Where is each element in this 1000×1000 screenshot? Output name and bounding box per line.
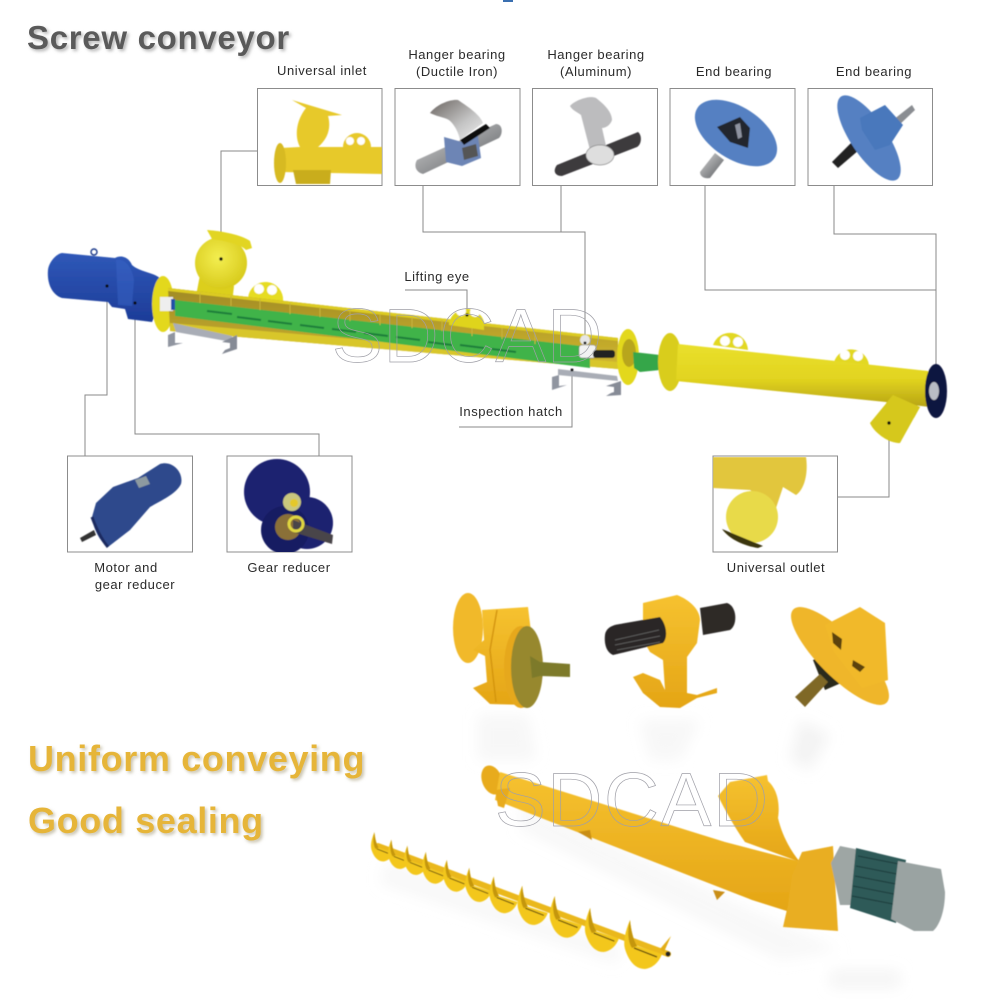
icon: universal outlet	[713, 457, 807, 548]
title: Screw conveyor	[29, 21, 292, 58]
label: lifting eye: Lifting eye	[404, 269, 470, 284]
middle flange	[617, 329, 639, 385]
panel: gear reducer: Gear reducer	[247, 560, 331, 575]
panel: hanger bearing ductile iron: (Ductile Iron)	[416, 64, 498, 79]
label: inspection hatch: Inspection hatch	[459, 404, 563, 419]
panel: motor and gear reducer: Motor and	[94, 560, 158, 575]
lugs right	[713, 333, 869, 365]
lifting eye lug	[449, 306, 484, 330]
electric motor	[831, 846, 860, 905]
icon: blue end bearing	[826, 86, 915, 190]
inlet	[718, 775, 800, 862]
panel: universal inlet	[258, 63, 382, 186]
motor	[48, 249, 161, 322]
panel: universal inlet: Universal inlet	[277, 63, 367, 78]
panel: hanger bearing aluminum: Hanger bearing	[547, 47, 645, 62]
headline: uniform conveying: Uniform conveying	[28, 738, 365, 779]
lifting lug	[248, 282, 283, 301]
panel: end bearing 1	[670, 64, 795, 186]
top edge mark	[503, 0, 513, 2]
flange left	[152, 276, 174, 332]
panel: hanger bearing ductile iron: Hanger bearing	[408, 47, 506, 62]
end plate	[925, 364, 947, 418]
hanger bearing in trough	[579, 335, 615, 358]
panel: hanger bearing aluminum: (Aluminum)	[560, 64, 632, 79]
headline: good sealing: Good sealing	[28, 800, 264, 841]
discharge outlet	[870, 395, 920, 443]
exposed green shaft	[633, 352, 660, 372]
panel: universal outlet: Universal outlet	[727, 560, 825, 575]
panel: motor and gear reducer	[68, 456, 192, 592]
screw shaft green	[175, 300, 590, 368]
casing	[477, 762, 507, 798]
product: conveyor assembly	[477, 762, 945, 931]
panel: end bearing 1: End bearing	[696, 64, 772, 79]
callout lines	[85, 151, 936, 497]
icon: gear reducer	[244, 459, 333, 554]
inlet	[195, 230, 252, 303]
product: end bearing yellow	[778, 594, 902, 718]
open trough	[160, 288, 618, 369]
icon: blue end disc	[683, 86, 789, 180]
product: gearbox	[453, 593, 570, 708]
panel: motor and gear reducer: gear reducer	[95, 577, 175, 592]
product: hanger bearing yellow	[605, 595, 735, 708]
mounting bracket left	[168, 323, 237, 354]
mounting bracket right	[552, 368, 621, 396]
title: Screw conveyor	[27, 19, 290, 56]
icon: aluminum hanger	[555, 97, 641, 176]
reflections and soft shadows	[380, 715, 900, 988]
watermark upper: SDCAD	[332, 294, 604, 379]
watermark lower: SDCAD	[495, 758, 770, 843]
panel: gear reducer	[227, 456, 352, 575]
panel: end bearing 2	[808, 64, 932, 190]
panel: hanger bearing aluminum	[532, 47, 658, 186]
panel: universal outlet	[713, 456, 838, 575]
main diagram: screw conveyor	[48, 230, 947, 443]
reducer block	[783, 846, 838, 931]
panel: end bearing 2: End bearing	[836, 64, 912, 79]
product: screw flights	[371, 832, 671, 969]
panel: hanger bearing ductile iron	[395, 47, 520, 186]
icon: universal inlet	[274, 100, 382, 184]
headline: uniform conveying: Uniform conveying	[30, 740, 367, 781]
yellow casing tube	[658, 333, 930, 425]
headline: good sealing: Good sealing	[30, 802, 266, 843]
icon: ductile hanger	[415, 100, 502, 174]
icon: motor	[80, 463, 181, 547]
